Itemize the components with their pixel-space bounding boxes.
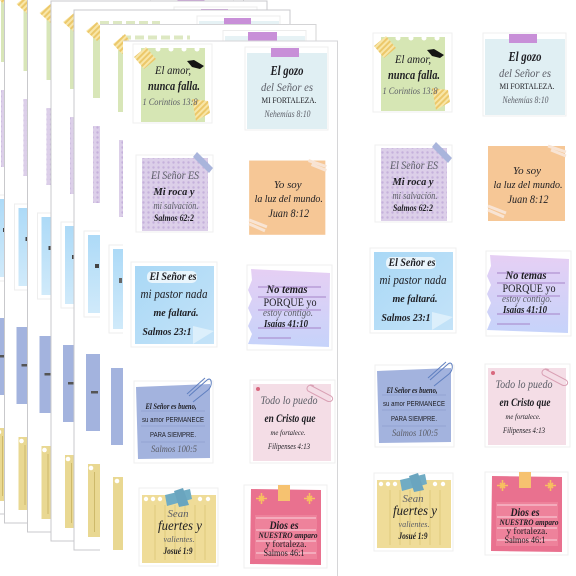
front sticker: El Señor ES: Salmos 62:2 [154, 214, 194, 224]
right sticker: El Señor es mi pastor: me faltará. [392, 293, 438, 305]
back sheet 6 [100, 24, 316, 576]
front sticker: Sean fuertes: Sean [168, 508, 189, 520]
front sticker: El Señor ES: El Señor ES [150, 168, 199, 182]
front sticker: El Señor es mi pastor: El Señor es [149, 271, 197, 283]
front sticker: El amor: El amor, [154, 63, 191, 77]
right sticker: El Señor ES: mi salvación. [392, 191, 438, 202]
right sticker: Dios es [485, 472, 568, 555]
front sticker: Sean fuertes: Josué 1:9 [163, 546, 193, 556]
right sticker: El Señor es mi pastor [370, 248, 456, 333]
right sticker: No temas: PORQUE yo [502, 281, 556, 295]
front sticker: Dios es: NUESTRO amparo [258, 531, 318, 540]
front sticker: Todo lo puedo: en Cristo que [264, 411, 316, 425]
right sticker: El Señor es bueno [375, 362, 454, 447]
back sheet 4 [51, 1, 267, 541]
front sticker: No temas [247, 265, 332, 350]
front sticker: El Señor es bueno: PARA SIEMPRE. [150, 430, 196, 439]
right sticker: El gozo: MI FORTALEZA. [500, 82, 554, 91]
right sticker: Sean fuertes: Josué 1:9 [398, 531, 428, 541]
right sticker: Dios es: y fortaleza. [506, 526, 548, 536]
right sticker: El Señor ES: Salmos 62:2 [393, 204, 433, 214]
right sticker: El Señor es mi pastor: mi pastor nada [380, 273, 446, 287]
right sticker: El amor: 1 Corintios 13:8 [382, 87, 438, 97]
right sticker: El Señor es bueno: Salmos 100:5 [392, 428, 438, 438]
front sticker: El Señor es bueno: su amor PERMANECE [142, 417, 204, 424]
back sheet 2 [4, 0, 220, 523]
right sticker: El Señor ES: Mi roca y [392, 176, 434, 188]
right sticker: Todo lo puedo: Todo lo puedo [496, 377, 552, 391]
right sticker: Sean fuertes: valientes. [398, 520, 430, 529]
right sticker: No temas: Isaías 41:10 [502, 305, 547, 316]
right sticker: El amor: El amor, [394, 52, 431, 66]
right sticker: No temas [486, 251, 571, 336]
right sticker: Dios es: Dios es [510, 505, 540, 519]
right sticker: Sean fuertes [374, 473, 453, 551]
front sticker: El amor: 1 Corintios 13:8 [142, 98, 198, 108]
back sheet 1 [0, 0, 198, 514]
right sticker: El Señor es mi pastor: Salmos 23:1 [382, 312, 430, 324]
front sticker: Todo lo puedo: Todo lo puedo [260, 393, 318, 407]
right sticker: Dios es: NUESTRO amparo [499, 518, 558, 527]
front sticker: El Señor es mi pastor: mi pastor nada [140, 287, 208, 301]
front sticker: Yo soy: la luz del mundo. [255, 193, 323, 205]
front sticker: Sean fuertes: fuertes y [158, 519, 203, 534]
front sticker: El Señor es bueno [134, 378, 213, 463]
right sticker: El Señor es bueno: PARA SIEMPRE. [391, 414, 437, 423]
right sticker: El Señor ES: El Señor ES [389, 158, 438, 172]
right sticker: Todo lo puedo: Filipenses 4:13 [502, 425, 545, 435]
front sticker: Yo soy: Juan 8:12 [268, 208, 309, 220]
front sticker: El Señor ES: mi salvación. [154, 201, 198, 212]
front sticker: Sean fuertes [139, 488, 218, 566]
front sticker: Yo soy: Yo soy [274, 179, 302, 191]
right sticker: El Señor es bueno: su amor PERMANECE [383, 401, 445, 408]
right sticker: El amor [373, 33, 452, 112]
right sticker: Todo lo puedo: me fortalece. [506, 413, 541, 421]
right sticker: El amor: nunca falla. [388, 68, 440, 82]
front sticker: El amor: nunca falla. [148, 79, 200, 93]
front sticker: Dios es [244, 485, 327, 568]
front sticker: El amor [133, 44, 212, 123]
front sticker: El gozo: del Señor es [261, 80, 313, 94]
front sticker: No temas: Isaías 41:10 [263, 319, 308, 330]
right sticker: El Señor es bueno: El Señor es bueno, [386, 386, 438, 395]
right sticker: Sean fuertes: Sean [402, 493, 424, 505]
front sticker: El Señor ES [136, 152, 213, 232]
right sticker: El gozo: del Señor es [499, 66, 551, 80]
front sticker: El gozo [245, 47, 328, 130]
front sticker: El Señor es bueno: El Señor es bueno, [145, 402, 196, 411]
right sticker: Yo soy: Juan 8:12 [508, 194, 549, 206]
right sticker: Todo lo puedo: en Cristo que [500, 395, 551, 409]
right sticker: Yo soy: la luz del mundo. [494, 179, 562, 191]
right sticker: No temas: No temas [505, 268, 547, 282]
back sheet 5 [74, 10, 290, 550]
right sticker: No temas: estoy contigo. [502, 294, 552, 305]
front sticker: Todo lo puedo: me fortalece. [270, 429, 306, 437]
right sticker: El Señor ES [375, 142, 452, 222]
front sticker: El Señor es mi pastor: Salmos 23:1 [142, 326, 192, 338]
right sticker: Yo soy: Yo soy [513, 165, 541, 177]
front sticker: El gozo: MI FORTALEZA. [262, 96, 316, 105]
back sheet 3 [28, 0, 244, 532]
front sticker: Dios es: Salmos 46:1 [264, 548, 304, 558]
front sticker: No temas: PORQUE yo [264, 295, 316, 309]
front sticker: Sean fuertes: valientes. [164, 535, 194, 544]
front sticker: El Señor es bueno: Salmos 100:5 [151, 444, 197, 454]
front sticker: El gozo: Nehemías 8:10 [264, 109, 311, 119]
right sticker: El Señor es mi pastor: El Señor es [388, 257, 436, 269]
front sticker: El gozo: El gozo [270, 64, 304, 79]
front sticker: Todo lo puedo [250, 380, 335, 463]
front sticker: El Señor es mi pastor [131, 262, 217, 347]
right sticker: Yo soy [488, 146, 566, 221]
front sticker: El Señor es mi pastor: me faltará. [154, 307, 198, 319]
front sticker: El Señor ES: Mi roca y [153, 186, 195, 198]
right sticker: El gozo: El gozo [508, 50, 542, 65]
front sticker: Yo soy [249, 161, 326, 235]
front sticker: No temas: No temas [266, 282, 308, 296]
front sticker: Todo lo puedo: Filipenses 4:13 [267, 441, 310, 451]
front sticker: Dios es: Dios es [269, 518, 299, 532]
front sticker: Dios es: y fortaleza. [266, 539, 306, 549]
front sticker: No temas: estoy contigo. [263, 308, 313, 319]
right sticker: Todo lo puedo [485, 364, 570, 447]
right sticker: El gozo: Nehemías 8:10 [502, 95, 549, 105]
right sticker: El gozo [483, 33, 566, 116]
front sheet [123, 41, 338, 576]
right sticker: Dios es: Salmos 46:1 [504, 535, 546, 545]
right sticker: Sean fuertes: fuertes y [393, 504, 438, 519]
